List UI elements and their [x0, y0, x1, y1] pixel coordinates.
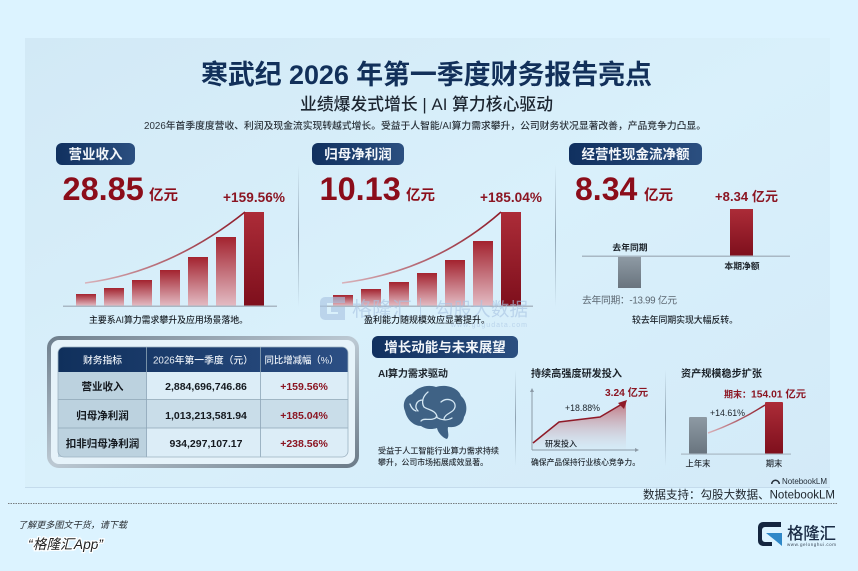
table: financial indicators: +185.04%: [280, 410, 328, 422]
download prompt: 了解更多图文干货，请下载: [18, 520, 129, 530]
heading: revenue: [56, 143, 135, 165]
table: financial indicators: +159.56%: [280, 381, 328, 393]
source note: 数据支持：勾股大数据、NotebookLM: [643, 488, 835, 502]
revenue value: 28.85: [62, 171, 144, 207]
panel: report background: [25, 38, 830, 488]
line chart: R&D: [530, 386, 648, 452]
watermark: 勾股大数据: [435, 299, 528, 320]
heading: revenue: 营业收入: [68, 146, 123, 162]
bar chart: cash flow comparison: 去年同期: [612, 242, 648, 252]
bar chart: assets: +14.61%: [710, 408, 745, 418]
panel: growth drivers and outlook: [372, 336, 806, 468]
NotebookLM badge: NotebookLM: [782, 477, 827, 486]
net profit value: 亿元: [406, 187, 435, 204]
driver: AI demand: AI算力需求驱动: [378, 367, 448, 380]
table: financial indicators: 财务指标: [83, 354, 122, 366]
driver: asset scale: 资产规模稳步扩张: [681, 367, 762, 380]
line chart: R&D: 3.24 亿元: [605, 386, 648, 399]
heading: cash flow: 经营性现金流净额: [582, 146, 690, 162]
bar chart: net profit trend: [320, 190, 542, 307]
revenue value: 亿元: [149, 187, 178, 204]
bar chart: assets: 期末: [766, 458, 783, 468]
table: financial indicators: 归母净利润: [76, 409, 129, 422]
caption: net profit: 盈利能力随规模效应显著提升。: [364, 314, 490, 325]
bar chart: cash flow comparison: [582, 189, 790, 306]
driver: AI demand: [378, 367, 499, 467]
heading: growth outlook: 增长动能与未来展望: [384, 339, 506, 355]
panel: operating cash flow: [569, 143, 790, 325]
app name: “格隆汇App”: [28, 537, 104, 552]
watermark: 格隆汇: [352, 298, 412, 321]
bar chart: cash flow comparison: 本期净额: [724, 260, 760, 271]
driver: AI demand: 受益于人工智能行业算力需求持续: [378, 446, 499, 456]
heading: cash flow: [569, 143, 702, 165]
table: financial indicators: [49, 338, 357, 466]
bar chart: assets: [681, 388, 806, 468]
line chart: R&D: 研发投入: [545, 438, 577, 448]
bar chart: net profit trend: +185.04%: [480, 190, 542, 205]
intro text: 2026年首季度度营收、利润及现金流实现转越式增长。受益于人智能/AI算力需求攀升，公司财务状况显著改善，产品竞争力凸显。: [144, 119, 706, 132]
table: financial indicators: 扣非归母净利润: [66, 437, 139, 450]
bar chart: cash flow comparison: 去年同期：-13.99 亿元: [582, 294, 677, 306]
cash flow value: 8.34: [575, 171, 637, 207]
subtitle: 业绩爆发式增长 | AI 算力核心驱动: [300, 95, 553, 114]
caption: cash flow: 较去年同期实现大幅反转。: [632, 314, 738, 325]
driver: asset scale: [681, 367, 806, 468]
icon: brain: [404, 386, 466, 439]
net profit value: 10.13: [320, 171, 401, 207]
watermark: www.gogudata.com: [450, 322, 528, 329]
driver: R&D investment: 持续高强度研发投入: [531, 367, 622, 380]
logo: Gelonghui: www.gelonghui.com: [787, 542, 836, 547]
title: 寒武纪 2026 年第一季度财务报告亮点: [201, 60, 652, 90]
heading: net profit: 归母净利润: [324, 146, 392, 162]
caption: revenue: 主要系AI算力需求攀升及应用场景落地。: [89, 314, 248, 325]
cash flow value: [575, 171, 673, 207]
table: financial indicators: 2,884,696,746.86: [165, 381, 247, 393]
panel: revenue: [56, 143, 285, 325]
table: financial indicators: 2026年第一季度（元）: [153, 354, 253, 366]
logo: Gelonghui: 格隆汇: [787, 524, 836, 543]
watermark: [320, 297, 528, 329]
bar chart: assets: 期末：: [724, 388, 751, 400]
table: financial indicators: +238.56%: [280, 438, 328, 450]
heading: net profit: [312, 143, 404, 165]
bar chart: revenue trend: [63, 190, 285, 307]
bar chart: revenue trend: +159.56%: [223, 190, 285, 205]
heading: growth outlook: [372, 336, 518, 358]
logo: Gelonghui: [758, 522, 836, 547]
bar chart: assets: 154.01 亿元: [751, 388, 806, 400]
panel: net profit: [312, 143, 542, 329]
cash flow value: 亿元: [644, 187, 673, 204]
bar chart: cash flow comparison: +8.34 亿元: [715, 189, 778, 204]
line chart: R&D: +18.88%: [565, 403, 600, 413]
table: financial indicators: 营业收入: [82, 380, 124, 393]
bar chart: assets: 上年末: [686, 458, 711, 468]
driver: R&D investment: [530, 367, 648, 467]
table: financial indicators: 同比增减幅（%）: [264, 354, 338, 366]
table: financial indicators: 1,013,213,581.94: [165, 410, 247, 422]
table: financial indicators: 934,297,107.17: [170, 438, 243, 450]
driver: AI demand: 攀升，公司市场拓展成效显著。: [378, 457, 488, 467]
driver: R&D investment: 确保产品保持行业核心竞争力。: [531, 457, 640, 467]
